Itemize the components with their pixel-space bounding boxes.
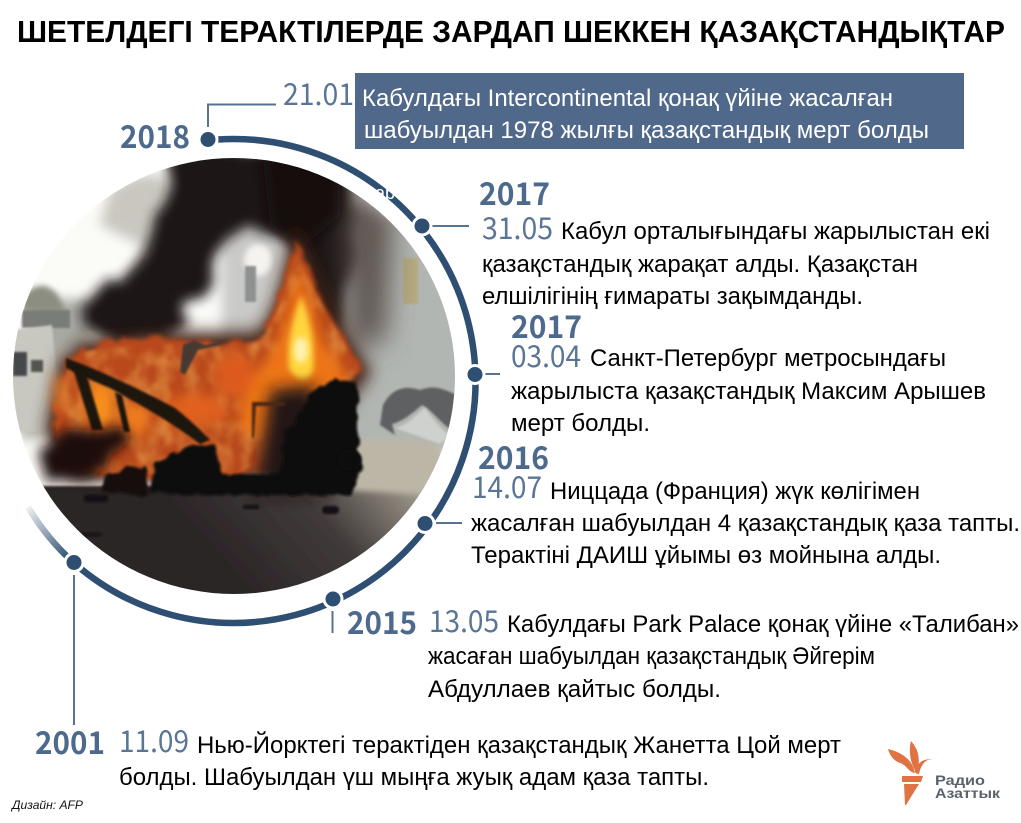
event: 2015 Kabul: Абдуллаев қайтыс болды. (428, 676, 721, 703)
event: 2017 Saint Petersburg: 2017 (511, 302, 582, 347)
wreck (255, 385, 330, 495)
event: 2015 Kabul: Кабулдағы Park Palace қонақ үйіне «Талибан» (507, 611, 1019, 638)
logo: Radio Azattyk (888, 741, 1001, 805)
event: 2018: Кабулдағы Intercontinental қонақ үйіне жасалған (362, 85, 893, 112)
event: 2017 Saint Petersburg: мерт болды. (511, 410, 650, 437)
event: 2001 New York: Нью-Йорктегі терактіден қазақстандық Жанетта Цой мерт (197, 731, 841, 759)
logo: Radio Azattyk: Радио (935, 772, 985, 788)
smoke (81, 150, 358, 345)
event: 2017 Kabul: елшілігінің ғимараты зақымданды. (482, 283, 863, 310)
event: 2016 Nice: 2016 (478, 433, 549, 478)
event: 2016 Nice: Ниццада (Франция) жүк көлігімен (550, 478, 920, 505)
logo: Radio Azattyk: Азаттык (935, 785, 1001, 801)
event: 2016 Nice: жасалған шабуылдан 4 қазақстандық қаза тапты. (471, 510, 1020, 537)
event: 2017 Kabul: қазақстандық жарақат алды. Қазақстан (482, 251, 918, 278)
event: 2018: 2018 (120, 112, 190, 157)
event: 2001 New York: 11.09 (119, 717, 189, 761)
hidden text fragment on ring: ар (375, 183, 395, 203)
flame texture (56, 255, 358, 474)
flames (52, 240, 362, 478)
event: 2017 Kabul: 2017 (479, 169, 550, 214)
icon: torch (888, 741, 933, 805)
event: 2017 Kabul: 31.05 (482, 204, 553, 248)
flame highlights (53, 268, 345, 440)
ground (42, 484, 425, 594)
event: 2001 New York: 2001 (35, 718, 105, 763)
credit: Дизайн: AFP (10, 798, 83, 812)
event: 2001 New York (35, 717, 841, 791)
connector lines (74, 104, 500, 725)
timeline dots (65, 130, 484, 608)
event: 2016 Nice: Терактіні ДАИШ ұйымы өз мойнына алды. (471, 542, 941, 569)
event: 2015 Kabul: жасаған шабуылдан қазақстандық Әйгерім (428, 643, 875, 670)
event: 2018: 21.01 (283, 70, 354, 114)
event: 2017 Saint Petersburg: Санкт-Петербург метросындағы (590, 345, 946, 372)
photo: burning car (13, 158, 455, 594)
callout box (355, 73, 964, 149)
event: 2017 Saint Petersburg (511, 302, 986, 437)
flame halo (45, 225, 372, 482)
event: 2015 Kabul: 2015 (347, 598, 417, 643)
event: 2017 Kabul: Кабул орталығындағы жарылыстан екі (561, 218, 990, 245)
timeline ring (28, 139, 476, 623)
event: 2016 Nice: 14.07 (472, 463, 542, 507)
event: 2016 Nice (471, 433, 1020, 569)
event: 2018: шабуылдан 1978 жылғы қазақстандық мерт болды (364, 117, 929, 144)
event: 2015 Kabul (347, 597, 1019, 703)
event: 2017 Saint Petersburg: жарылыста қазақстандық Максим Арышев (511, 378, 986, 405)
event: 2017 Kabul (479, 169, 990, 310)
event: 2001 New York: болды. Шабуылдан үш мыңға жуық адам қаза тапты. (119, 764, 709, 791)
debris (380, 387, 455, 435)
event: 2017 Saint Petersburg: 03.04 (511, 332, 581, 376)
title: ШЕТЕЛДЕГІ ТЕРАКТІЛЕРДЕ ЗАРДАП ШЕККЕН ҚАЗАҚСТАНДЫҚТАР (17, 14, 1005, 49)
event: 2018 (120, 70, 964, 157)
event: 2015 Kabul: 13.05 (429, 597, 499, 641)
